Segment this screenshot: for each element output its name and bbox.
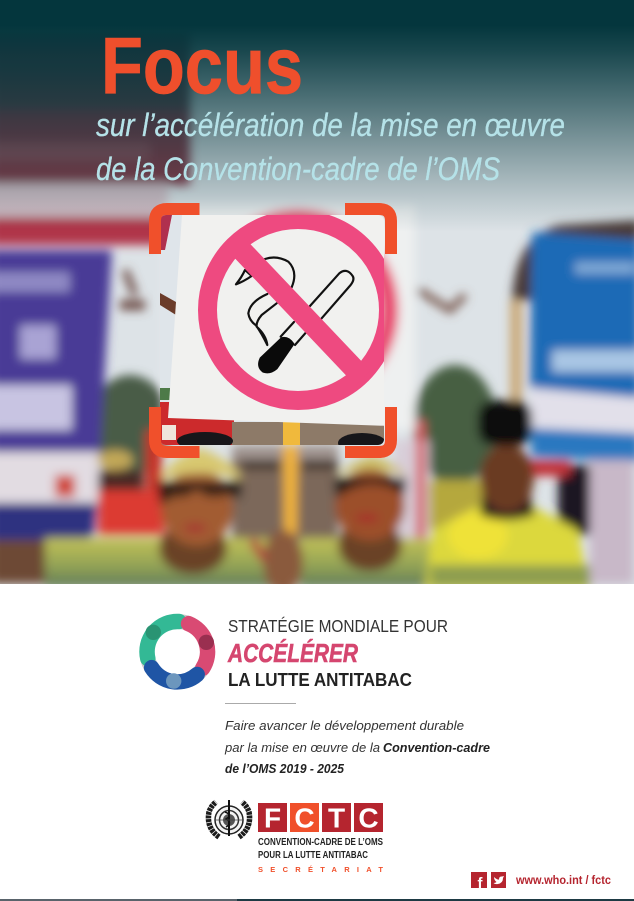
background photo: blurred demonstration crowd: [0, 0, 634, 594]
focus brackets: [155, 209, 391, 452]
left purple placard: [0, 250, 112, 540]
FCTC logo: C: [294, 802, 315, 834]
FCTC logo: CONVENTION-CADRE DE L’OMS: [258, 837, 383, 848]
top-left red banner: [0, 30, 190, 245]
blurred sign: [165, 205, 415, 430]
kid 2: [300, 456, 430, 588]
strategy ring logo: [146, 621, 214, 689]
trees: [90, 365, 497, 530]
dark teal gradient overlay: [0, 0, 634, 232]
strategy heading: STRATÉGIE MONDIALE POUR: [228, 616, 448, 636]
FCTC logo: T: [328, 802, 345, 834]
icon: twitter: [491, 872, 506, 888]
subtitle: [96, 107, 565, 187]
strategy description: de l’OMS 2019 - 2025: [225, 761, 345, 776]
strategy description: [224, 718, 490, 776]
strategy heading: ACCÉLÉRER: [227, 638, 358, 668]
strategy description: Faire avancer le développement durable: [225, 718, 464, 733]
sign board: [168, 215, 390, 426]
icon: facebook: f: [478, 875, 484, 892]
FCTC logo: [258, 802, 383, 874]
strategy heading: [227, 616, 448, 690]
white lower panel: [0, 584, 634, 901]
subtitle: sur l’accélération de la mise en œuvre: [96, 107, 565, 143]
FCTC logo: C: [358, 802, 379, 834]
icon: cigarette: [259, 271, 353, 372]
title: Focus: [101, 21, 303, 110]
FCTC logo: F: [264, 802, 281, 834]
subtitle: de la Convention-cadre de l’OMS: [96, 151, 500, 187]
blurred red panel and mid-ground: [97, 420, 634, 584]
strategy heading: LA LUTTE ANTITABAC: [228, 670, 412, 690]
website link: www.who.int / fctc: [515, 875, 612, 887]
strategy description: Convention-cadre: [383, 740, 490, 755]
sharp focus window: no-smoking sign: [160, 215, 390, 453]
icon: smoke: [236, 257, 294, 345]
WHO emblem: [208, 800, 250, 837]
FCTC logo: SECRÉTARIAT: [258, 865, 383, 874]
kid 3: [425, 400, 590, 590]
FCTC logo: POUR LA LUTTE ANTITABAC: [258, 850, 368, 861]
stick and hand: [120, 270, 465, 594]
prohibition sign: [208, 220, 388, 400]
icon: facebook: [471, 872, 487, 892]
strategy description: par la mise en œuvre de la: [224, 740, 380, 755]
kid 1: [0, 448, 295, 588]
right blue placard: [510, 220, 634, 462]
